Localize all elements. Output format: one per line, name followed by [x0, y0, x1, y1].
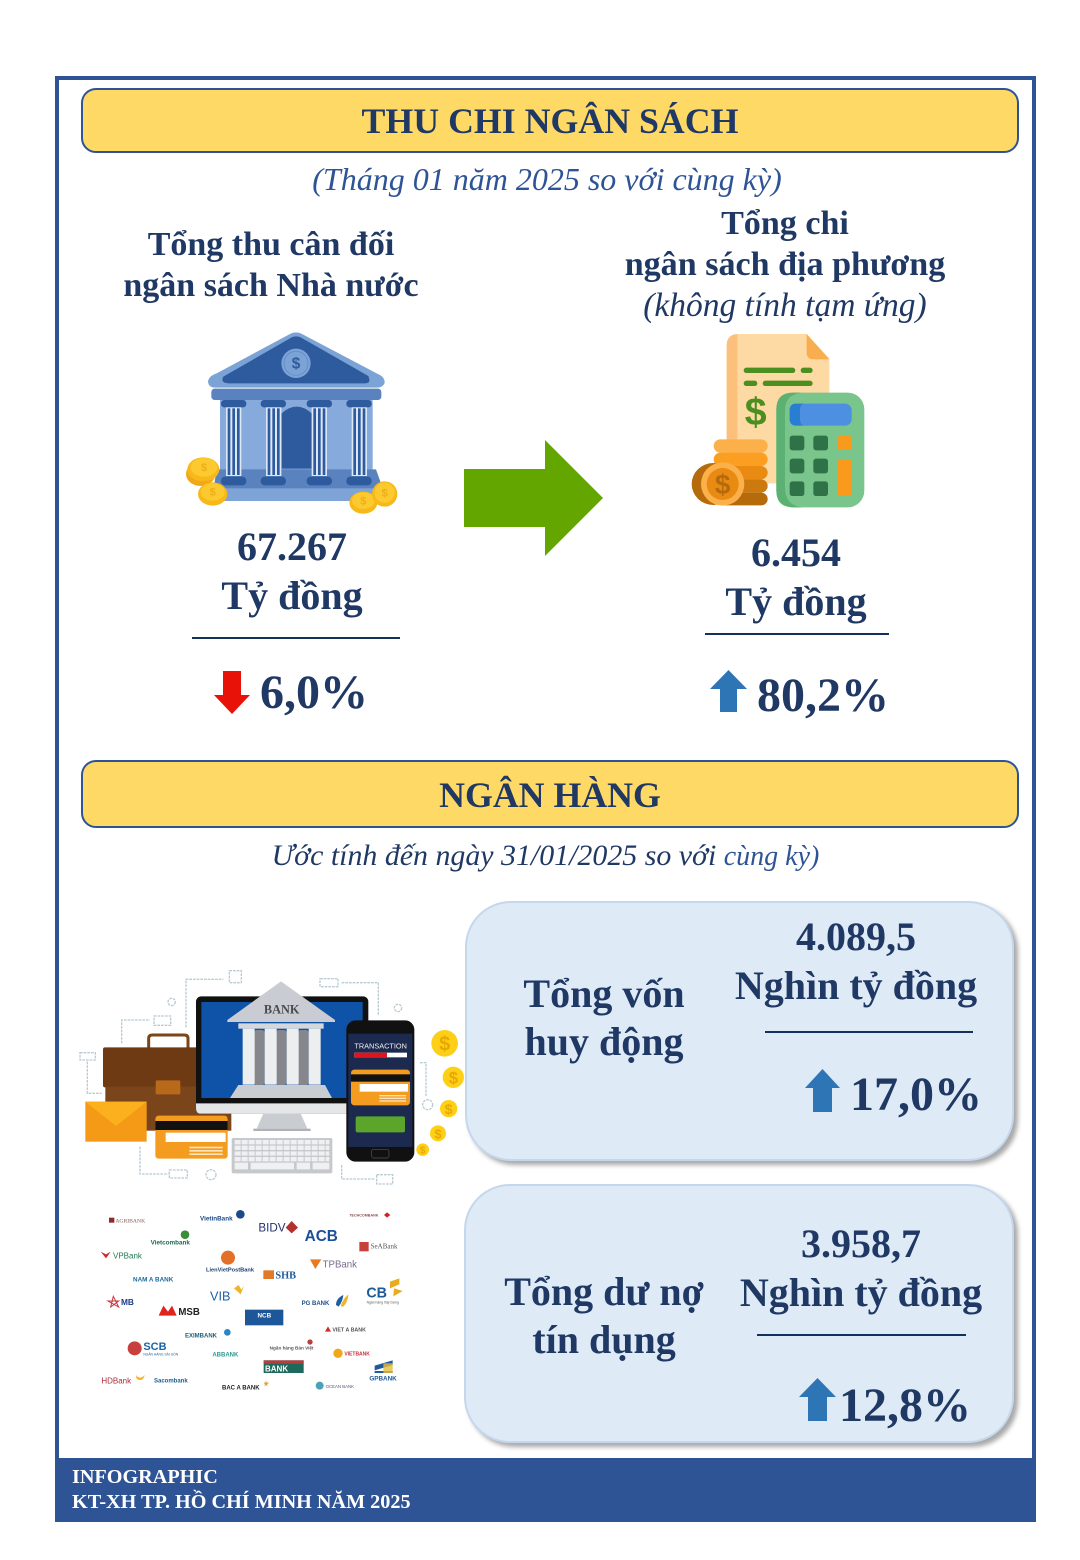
footer text: INFOGRAPHIC: [72, 1466, 218, 1488]
icon: document, coins and calculator: $: [745, 390, 767, 434]
illustration: bank logos: PG BANK: [302, 1301, 330, 1307]
value: total credit: Nghìn tỷ đồng: [740, 1270, 982, 1315]
icon: blue up arrow: [805, 1069, 840, 1112]
divider: total credit: [757, 1334, 966, 1336]
illustration: bank logos: ABBANK: [212, 1353, 239, 1359]
percentage: total deposits: 17,0%: [850, 1068, 982, 1121]
divider: revenue: [192, 637, 400, 639]
illustration: bank logos: [100, 1210, 402, 1392]
percentage: total credit: 12,8%: [839, 1379, 971, 1432]
value: spending: [725, 530, 867, 624]
icon: document, coins and calculator: $: [715, 469, 731, 500]
panel: total deposits: [465, 901, 1014, 1161]
icon: bank building: [186, 332, 398, 514]
footer text: [72, 1466, 411, 1513]
illustration: online banking: [79, 970, 464, 1185]
illustration: online banking: $: [439, 1034, 450, 1056]
subtitle: budget period: (Tháng 01 năm 2025 so với cùng kỳ): [312, 161, 782, 197]
illustration: bank logos: BIDV: [258, 1222, 286, 1235]
illustration: bank logos: SeABank: [371, 1243, 398, 1251]
footer text: KT-XH TP. HỒ CHÍ MINH NĂM 2025: [72, 1491, 411, 1513]
illustration: bank logos: LienVietPostBank: [206, 1268, 255, 1274]
heading: thu chi ngan sach: [81, 88, 1019, 153]
heading: ngan hang: [81, 760, 1019, 828]
icon: bank building: $: [360, 495, 367, 507]
illustration: online banking: $: [434, 1127, 442, 1141]
change: spending up 80.2 percent: [710, 669, 889, 722]
label: total revenue: ngân sách Nhà nước: [123, 267, 419, 304]
icon: red down arrow: [214, 671, 250, 714]
value: total credit: [740, 1221, 982, 1315]
value: total credit: 3.958,7: [801, 1221, 921, 1266]
icon: blue up arrow: [710, 670, 747, 712]
label: total deposits: Tổng vốn: [523, 971, 685, 1016]
illustration: bank logos: OCEAN BANK: [326, 1384, 354, 1389]
illustration: bank logos: NAM A BANK: [133, 1277, 174, 1284]
illustration: bank logos: Ngân hàng Bản Việt: [270, 1346, 314, 1351]
label: total credit: [504, 1269, 704, 1362]
value: total deposits: [735, 914, 977, 1008]
illustration: bank logos: NGÂN HÀNG SÀI GÒN: [143, 1351, 179, 1356]
illustration: online banking: $: [445, 1101, 453, 1117]
value: spending: Tỷ đồng: [725, 578, 867, 624]
label: total spending: ngân sách địa phương: [625, 246, 945, 283]
divider: total deposits: [765, 1031, 973, 1033]
illustration: bank logos: SCB: [143, 1341, 167, 1353]
arrow: revenue to spending: [464, 440, 603, 556]
illustration: bank logos: VIETBANK: [344, 1351, 370, 1357]
label: total spending: Tổng chi: [721, 205, 849, 242]
illustration: bank logos: BAC A BANK: [222, 1386, 260, 1392]
illustration: bank logos: SHB: [275, 1270, 296, 1281]
label: total spending: (không tính tạm ứng): [643, 287, 927, 324]
illustration: bank logos: MSB: [178, 1307, 200, 1318]
illustration: bank logos: VPBank: [113, 1251, 143, 1260]
divider: spending: [705, 633, 889, 635]
value: revenue: [221, 524, 363, 618]
footer band: [55, 1458, 1036, 1522]
illustration: bank logos: ACB: [305, 1228, 338, 1245]
label: total revenue: [123, 226, 419, 304]
label: total spending: [625, 205, 945, 324]
value: total deposits: 4.089,5: [796, 914, 916, 959]
percentage: revenue: 6,0%: [260, 666, 368, 719]
illustration: bank logos: Vietcombank: [151, 1240, 190, 1247]
illustration: bank logos: VIB: [210, 1289, 230, 1303]
illustration: online banking: TRANSACTION: [354, 1042, 407, 1051]
subtitle: bank period: Ước tính đến ngày 31/01/2025 so với cùng kỳ): [272, 839, 819, 872]
panel: total credit: [464, 1184, 1014, 1443]
illustration: bank logos: TECHCOMBANK: [349, 1213, 379, 1217]
icon: bank building: $: [201, 462, 208, 474]
illustration: bank logos: EXIMBANK: [185, 1334, 218, 1340]
illustration: bank logos: MB: [121, 1297, 134, 1307]
illustration: bank logos: Sacombank: [154, 1378, 188, 1384]
illustration: online banking: $: [449, 1069, 459, 1088]
value: revenue: Tỷ đồng: [221, 572, 363, 618]
illustration: bank logos: HDBank: [101, 1377, 132, 1386]
illustration: bank logos: BANK: [265, 1365, 288, 1374]
value: spending: 6.454: [751, 530, 841, 575]
change: revenue down 6.0 percent: [214, 666, 368, 719]
illustration: bank logos: Ngân hàng Xây Dựng: [367, 1301, 399, 1305]
illustration: bank logos: VIET A BANK: [332, 1327, 366, 1333]
value: revenue: 67.267: [237, 524, 347, 569]
icon: bank building: $: [292, 356, 301, 373]
heading text: ngan hang: NGÂN HÀNG: [439, 775, 661, 815]
illustration: bank logos: GPBANK: [369, 1375, 397, 1382]
label: total revenue: Tổng thu cân đối: [148, 226, 394, 263]
icon: document, coins and calculator: [692, 334, 864, 508]
icon: bank building: $: [382, 488, 389, 500]
icon: bank building: $: [210, 487, 217, 499]
illustration: online banking: BANK: [264, 1003, 300, 1017]
percentage: spending: 80,2%: [757, 669, 889, 722]
illustration: bank logos: TPBank: [323, 1260, 357, 1271]
label: total deposits: huy động: [524, 1019, 683, 1064]
label: total deposits: [523, 971, 685, 1064]
illustration: online banking: $: [420, 1146, 426, 1157]
illustration: bank logos: AGRIBANK: [115, 1218, 146, 1224]
illustration: bank logos: CB: [366, 1285, 387, 1301]
heading text: thu chi ngan sach: THU CHI NGÂN SÁCH: [362, 101, 738, 141]
label: total credit: tín dụng: [532, 1317, 676, 1362]
value: total deposits: Nghìn tỷ đồng: [735, 963, 977, 1008]
icon: blue up arrow: [799, 1378, 836, 1421]
illustration: bank logos: NCB: [257, 1313, 272, 1320]
illustration: bank logos: VietinBank: [200, 1215, 233, 1222]
label: total credit: Tổng dư nợ: [504, 1269, 704, 1314]
